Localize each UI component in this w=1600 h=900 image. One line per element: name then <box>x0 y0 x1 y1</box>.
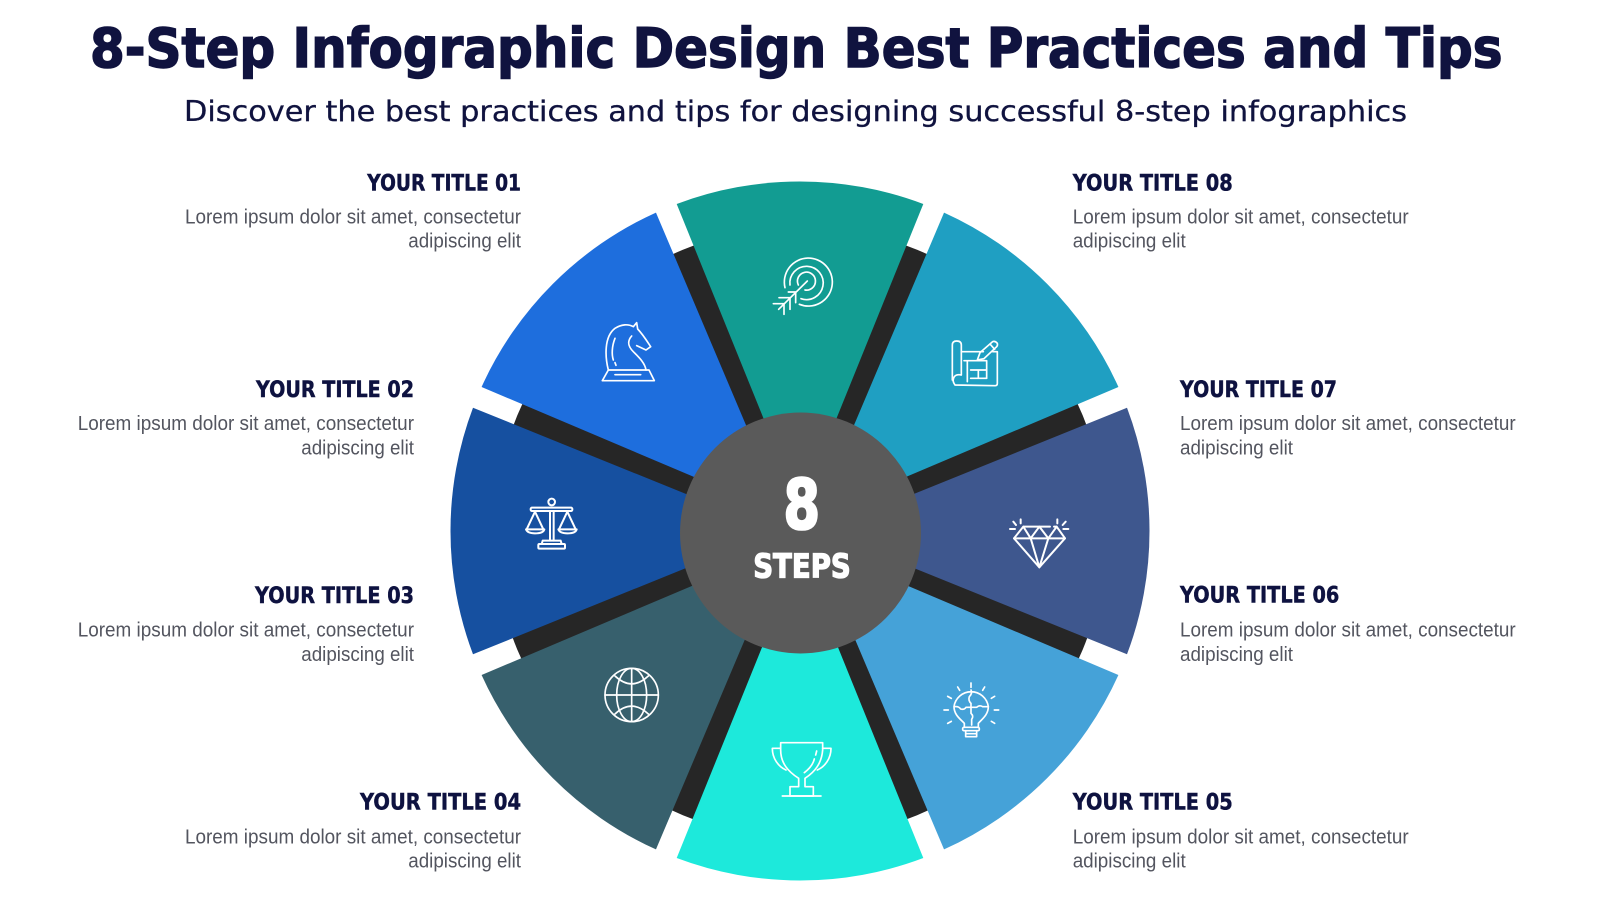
text block 07: Lorem ipsum dolor sit amet, consectetur <box>1180 413 1516 435</box>
text block 01: YOUR TITLE 01 <box>366 171 521 197</box>
text block 01: Lorem ipsum dolor sit amet, consectetur <box>185 206 521 228</box>
icon: target with arrow <box>773 258 832 314</box>
text block 04: Lorem ipsum dolor sit amet, consectetur <box>185 826 521 848</box>
text block 08 <box>1072 171 1409 253</box>
text block 07: YOUR TITLE 07 <box>1179 377 1337 403</box>
text block 03: adipiscing elit <box>301 644 414 666</box>
text block 04: adipiscing elit <box>408 851 521 873</box>
text block 06: Lorem ipsum dolor sit amet, consectetur <box>1180 620 1516 642</box>
text block 05 <box>1072 789 1409 873</box>
text block 02: adipiscing elit <box>301 437 414 459</box>
text block 03: Lorem ipsum dolor sit amet, consectetur <box>78 620 414 642</box>
hub label: STEPS <box>753 548 851 586</box>
text block 02: Lorem ipsum dolor sit amet, consectetur <box>78 413 414 435</box>
text block 04 <box>185 789 521 873</box>
segment 07 cyan <box>769 197 1134 562</box>
icon: blueprint with pencil <box>952 341 997 386</box>
text block 05: adipiscing elit <box>1073 851 1186 873</box>
center hub <box>680 412 921 654</box>
icon: chess knight <box>602 323 654 381</box>
segment 08 teal top <box>677 181 923 451</box>
text block 02: YOUR TITLE 02 <box>255 377 414 403</box>
wheel diagram <box>450 181 1150 881</box>
text block 03: YOUR TITLE 03 <box>254 583 414 609</box>
hub number: 8 <box>784 465 820 545</box>
text block 07 <box>1179 377 1516 459</box>
text block 06: adipiscing elit <box>1180 644 1293 666</box>
segment 04 turquoise bottom <box>677 611 923 881</box>
icon: globe <box>605 668 658 722</box>
text block 07: adipiscing elit <box>1180 437 1293 459</box>
segment 02 dark blue <box>450 408 720 654</box>
segment 05 light blue <box>769 500 1134 865</box>
subtitle: Discover the best practices and tips for designing successful 8-step infographics <box>184 95 1407 128</box>
icon: diamond <box>1010 519 1068 567</box>
text block 05: Lorem ipsum dolor sit amet, consectetur <box>1073 826 1409 848</box>
text block 06 <box>1179 583 1516 666</box>
text block 08: YOUR TITLE 08 <box>1072 171 1233 197</box>
text block 05: YOUR TITLE 05 <box>1072 789 1233 815</box>
text block 06: YOUR TITLE 06 <box>1179 583 1339 609</box>
text block 08: Lorem ipsum dolor sit amet, consectetur <box>1073 206 1409 228</box>
segment 01 blue <box>466 197 831 562</box>
icon: trophy <box>772 743 831 796</box>
icon: balance scale <box>526 499 577 549</box>
text block 04: YOUR TITLE 04 <box>359 789 521 815</box>
text block 02 <box>78 377 414 459</box>
title: 8-Step Infographic Design Best Practices and Tips <box>90 16 1502 80</box>
segment 03 slate <box>466 500 831 865</box>
text block 01 <box>185 171 521 253</box>
text block 01: adipiscing elit <box>408 231 521 253</box>
segment 06 indigo <box>880 408 1150 654</box>
icon: puzzle light bulb <box>944 683 999 737</box>
text block 08: adipiscing elit <box>1073 231 1186 253</box>
text block 03 <box>78 583 414 666</box>
